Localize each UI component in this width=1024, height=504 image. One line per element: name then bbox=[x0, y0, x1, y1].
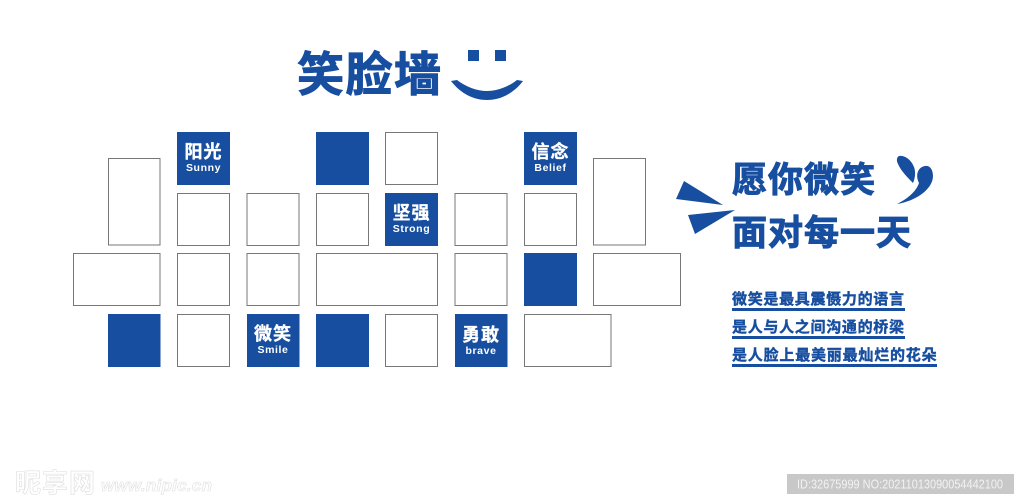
tile: smile: 微笑 bbox=[254, 324, 292, 344]
slogan line 1: 愿你微笑 bbox=[732, 161, 876, 200]
photo wall grid bbox=[74, 132, 680, 367]
tile: top outline bbox=[386, 132, 438, 184]
watermark: site name: 昵享网 bbox=[15, 468, 96, 498]
tile: row 4 outline b bbox=[386, 314, 438, 366]
tile: row 2 outline b bbox=[247, 194, 299, 246]
text: description line 2: 是人与人之间沟通的桥梁 bbox=[732, 318, 905, 336]
watermark: image id bbox=[787, 474, 1014, 494]
tile: brave bbox=[455, 314, 508, 367]
tile: belief: Belief bbox=[534, 162, 567, 174]
tile: strong bbox=[385, 193, 438, 246]
tile: row 2 outline c bbox=[316, 194, 368, 246]
tile: sunny bbox=[177, 132, 230, 185]
tile: row 3 outline c bbox=[455, 254, 507, 306]
tile: sunny: Sunny bbox=[186, 162, 221, 174]
icon: quotation marks bbox=[897, 156, 933, 204]
tile: smile bbox=[247, 314, 300, 367]
tile: row 4 outline a bbox=[178, 314, 230, 366]
tile: brave: 勇敢 bbox=[462, 325, 500, 345]
tile: sunny: 阳光 bbox=[184, 142, 222, 162]
tile: wide right bbox=[594, 254, 680, 306]
tile: strong: Strong bbox=[393, 223, 430, 235]
tile: blue row 4 middle bbox=[316, 314, 369, 367]
tile: row 3 outline b bbox=[247, 254, 299, 306]
text: description line 3: 是人脸上最美丽最灿烂的花朵 bbox=[732, 346, 937, 364]
tile: smile: Smile bbox=[257, 344, 289, 356]
tile: row 2 outline e bbox=[524, 194, 576, 246]
tile: row 2 outline a bbox=[178, 194, 230, 246]
icon: burst triangles bbox=[676, 181, 735, 234]
tile: blue row 3 bbox=[524, 253, 577, 306]
tile: tall right bbox=[594, 158, 646, 245]
tile: tall left bbox=[108, 158, 160, 245]
tile: strong: 坚强 bbox=[392, 203, 430, 223]
icon: smiley face bbox=[451, 50, 523, 100]
text: description line 1: 微笑是最具震慑力的语言 bbox=[732, 290, 905, 308]
tile: blue top bbox=[316, 132, 369, 185]
tile: wide left bbox=[74, 254, 160, 306]
tile: brave: brave bbox=[465, 345, 497, 357]
tile: wide bottom bbox=[524, 314, 611, 366]
watermark: site name bbox=[15, 468, 212, 498]
tile: belief: 信念 bbox=[532, 141, 570, 162]
tile: belief bbox=[524, 132, 577, 185]
tile: blue row 4 left bbox=[108, 314, 160, 367]
slogan line 2: 面对每一天 bbox=[732, 214, 912, 253]
title: 笑脸墙 bbox=[297, 48, 442, 101]
tile: row 2 outline d bbox=[455, 194, 507, 246]
tile: wide middle bbox=[316, 254, 438, 306]
tile: row 3 outline a bbox=[178, 254, 230, 306]
watermark: site name: www.nipic.cn bbox=[101, 476, 212, 495]
